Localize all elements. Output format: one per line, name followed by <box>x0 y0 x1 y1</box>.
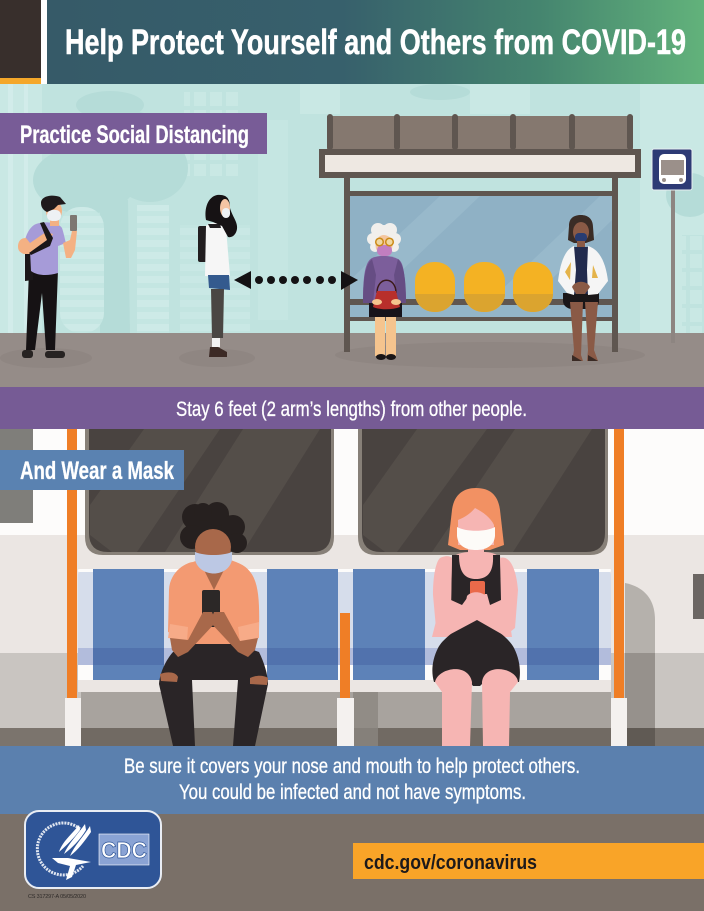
person: man with phone <box>18 196 77 358</box>
logo: HHS and CDC <box>25 811 161 888</box>
person: older woman with handbag <box>363 223 406 360</box>
logo: HHS and CDC: CDC <box>101 837 147 863</box>
person: woman with backpack <box>198 195 237 357</box>
subway poles <box>65 429 627 746</box>
heading: And Wear a Mask: And Wear a Mask <box>20 457 174 485</box>
person: seated woman in white jacket <box>558 215 608 361</box>
title banner <box>47 0 704 84</box>
subway windows <box>85 429 608 555</box>
publication code: CS 317297-A 05/05/2020 <box>28 894 86 900</box>
panel: subway train interior <box>0 429 704 746</box>
banner: mask message: You could be infected and not have symptoms. <box>179 781 526 804</box>
handbag <box>372 280 401 309</box>
footer <box>0 811 704 911</box>
banner: stay 6 feet <box>0 387 704 429</box>
web address bar <box>353 843 704 879</box>
web address bar: cdc.gov/coronavirus <box>364 852 537 874</box>
person: seated rider in orange shirt <box>159 502 268 746</box>
heading: Practice Social Distancing <box>0 113 267 154</box>
bus shelter <box>319 114 641 352</box>
icon: bus stop sign <box>652 149 692 343</box>
banner: mask message <box>0 746 704 814</box>
person: seated rider in black tank top <box>432 488 520 746</box>
banner: mask message: Be sure it covers your nose and mouth to help protect others. <box>124 755 580 778</box>
seats <box>415 262 553 312</box>
ground <box>0 333 704 388</box>
banner: stay 6 feet: Stay 6 feet (2 arm’s lengths) from other people. <box>176 398 527 421</box>
heading: And Wear a Mask <box>0 450 184 490</box>
heading: Practice Social Distancing: Practice Social Distancing <box>20 121 249 149</box>
panel: social distancing street scene <box>0 84 704 388</box>
subway bench <box>78 569 611 692</box>
arrow: six feet distance <box>234 271 358 290</box>
header: dark block with orange bar <box>0 0 41 84</box>
